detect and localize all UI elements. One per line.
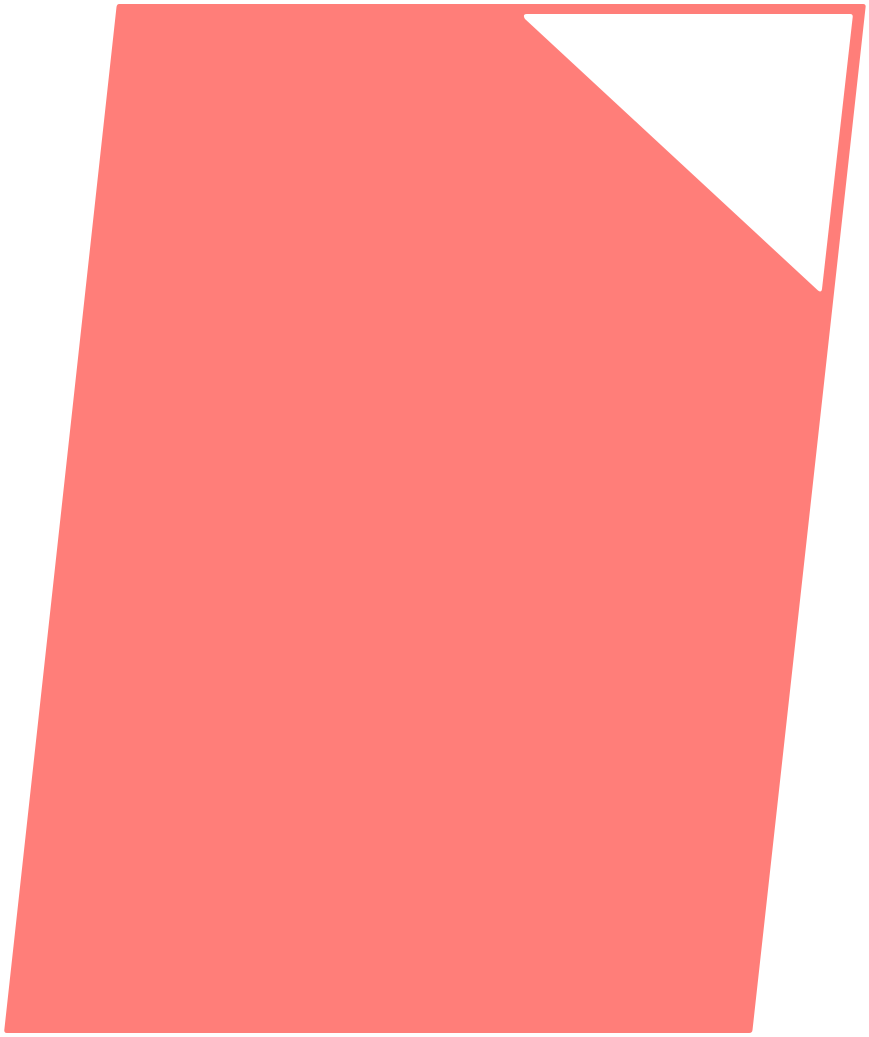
icon: white triangular corner cutout (524, 14, 853, 291)
